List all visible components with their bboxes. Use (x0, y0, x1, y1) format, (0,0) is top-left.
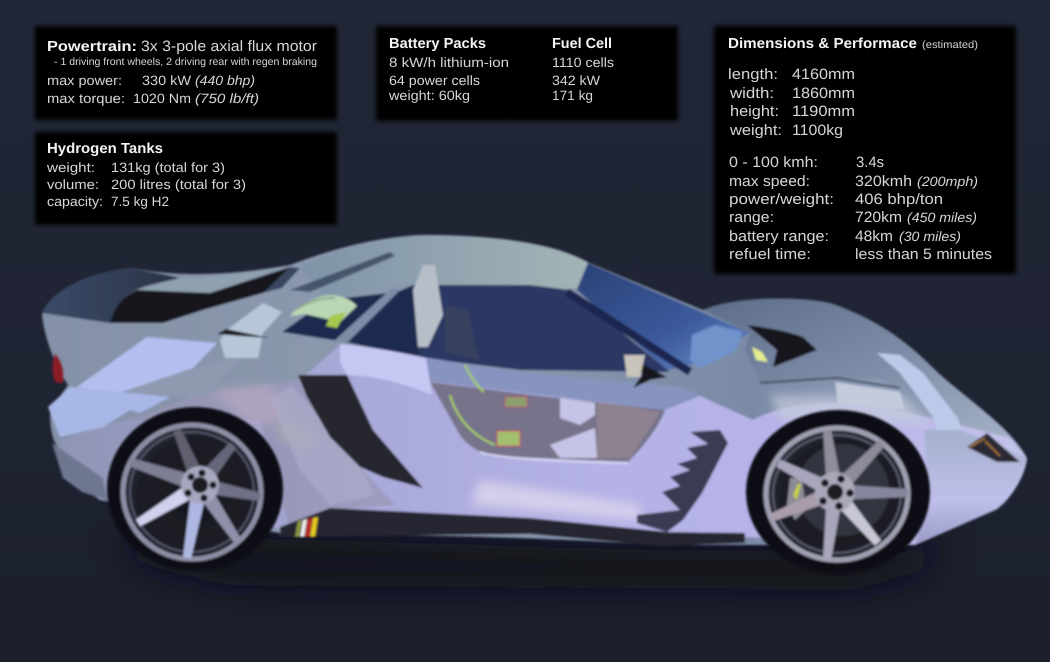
windshield (577, 263, 750, 370)
front intake fins (637, 430, 728, 532)
fuel cell heading: Fuel Cell (552, 36, 612, 52)
rear inner panel (115, 358, 240, 397)
B-pillar (413, 265, 443, 347)
battery heading: Battery Packs (389, 36, 486, 52)
sill colour stripes (295, 517, 318, 537)
engine bay slit (747, 325, 817, 367)
panel: hydrogen tanks (35, 132, 337, 225)
front ribbed block (835, 382, 905, 410)
side sill (280, 508, 745, 546)
hydrogen tank (290, 295, 357, 328)
battery range: battery range: (729, 228, 829, 245)
front hub (815, 472, 855, 512)
power to weight value: 406 bhp/ton (855, 191, 943, 208)
max speed value: 320kmh (855, 173, 912, 190)
capacity value: 7.5 kg H2 (111, 194, 169, 209)
rear bright storage block (77, 337, 217, 395)
max torque value: 1020 Nm (133, 91, 191, 106)
cockpit glass (413, 285, 670, 372)
front nose panel (915, 430, 1027, 545)
weight: weight: (729, 122, 782, 139)
brake caliper (787, 478, 806, 520)
car illustration (42, 235, 1027, 546)
seat marker upper (505, 397, 527, 407)
soft fender tints (210, 385, 1010, 520)
panel: battery packs and fuel cell (376, 26, 678, 121)
front spokes (772, 430, 908, 560)
powertrain heading: Powertrain: (47, 39, 137, 55)
door window cut-out with seats (430, 365, 665, 463)
max speed mph: (200mph) (917, 174, 978, 189)
rear tyre (107, 407, 283, 571)
rear deck dark recess (110, 267, 290, 323)
battery weight: weight: 60kg (388, 88, 470, 103)
rear hub (181, 466, 219, 504)
dashboard block (690, 325, 742, 368)
rear roof glass streak (290, 252, 395, 292)
estimated note: (estimated) (922, 39, 978, 51)
door mirror (624, 355, 667, 388)
refuel time: refuel time: (729, 246, 811, 263)
weight value: 131kg (total for 3) (111, 160, 225, 175)
powertrain motor: 3x 3-pole axial flux motor (141, 38, 317, 55)
hood dome (703, 299, 1010, 438)
rear spoiler dark surface (42, 268, 180, 323)
roof cap (300, 235, 588, 300)
rear air slit (217, 329, 270, 338)
door shoulder band (400, 355, 700, 410)
brake disc (797, 444, 889, 536)
engine block (220, 303, 282, 358)
fuel cell weight: 171 kg (552, 88, 593, 103)
rear side intake (298, 375, 423, 488)
front rim (766, 428, 908, 560)
panel: powertrain (35, 26, 337, 120)
rear bumper translucent (48, 387, 170, 437)
max power value: 330 kW (142, 73, 191, 88)
range miles: (450 miles) (907, 210, 977, 225)
range: range: (729, 209, 774, 226)
seat silhouette (445, 305, 480, 360)
length value: 4160mm (792, 66, 855, 83)
front suspension arm (877, 353, 967, 460)
front tyre (746, 410, 930, 574)
rear rim (123, 425, 261, 559)
capacity label: capacity: (47, 194, 103, 209)
height value: 1190mm (792, 103, 855, 120)
shoulder highlight (340, 344, 432, 395)
yellow-green part at cowl (752, 347, 768, 362)
powertrain note: - 1 driving front wheels, 2 driving rear with regen braking (54, 56, 317, 68)
car body silhouette (42, 235, 1027, 545)
hydrogen heading: Hydrogen Tanks (47, 141, 163, 157)
range value: 720km (855, 209, 902, 226)
panel: dimensions and performance (714, 26, 1016, 274)
max power: max power: (47, 73, 122, 88)
rear spokes (129, 428, 261, 559)
max torque: max torque: (47, 91, 125, 106)
max power bhp: (440 bhp) (195, 73, 255, 88)
headlight (967, 433, 1020, 462)
front fender line (760, 378, 900, 388)
quarter pillar (333, 288, 400, 342)
seat marker lower (497, 431, 520, 446)
acceleration value: 3.4s (856, 154, 884, 171)
battery cells: 64 power cells (389, 73, 480, 88)
refuel time value: less than 5 minutes (855, 246, 992, 263)
rear body lower panels (60, 345, 1027, 545)
radiator panel (270, 385, 375, 505)
width value: 1860mm (792, 85, 855, 102)
rear deck light strip (137, 265, 290, 293)
windshield pillar (567, 292, 690, 372)
rear fender tone (120, 380, 395, 530)
max torque lb/ft: (750 lb/ft) (195, 91, 259, 106)
engine vents (263, 267, 300, 293)
fuel cell power: 342 kW (552, 73, 600, 88)
quarter glass (282, 285, 420, 358)
battery capacity: 8 kW/h lithium-ion (389, 55, 509, 70)
length: length: (728, 66, 778, 83)
front wheel (746, 410, 930, 574)
rear lower bumper (52, 443, 107, 500)
power to weight: power/weight: (729, 191, 834, 208)
battery range miles: (30 miles) (899, 229, 961, 244)
battery range value: 48km (855, 228, 893, 245)
volume label: volume: (47, 177, 99, 192)
weight value: 1100kg (792, 122, 843, 139)
height: height: (730, 103, 779, 120)
width: width: (729, 85, 774, 102)
rear wheel (107, 407, 283, 571)
ground shadow (120, 535, 950, 590)
dimensions heading: Dimensions & Performace (728, 36, 917, 52)
max speed: max speed: (729, 173, 810, 190)
fuel cell count: 1110 cells (552, 55, 614, 70)
tail light (52, 353, 64, 383)
weight label: weight: (46, 160, 95, 175)
acceleration: 0 - 100 kmh: (729, 154, 818, 171)
volume value: 200 litres (total for 3) (111, 177, 246, 192)
